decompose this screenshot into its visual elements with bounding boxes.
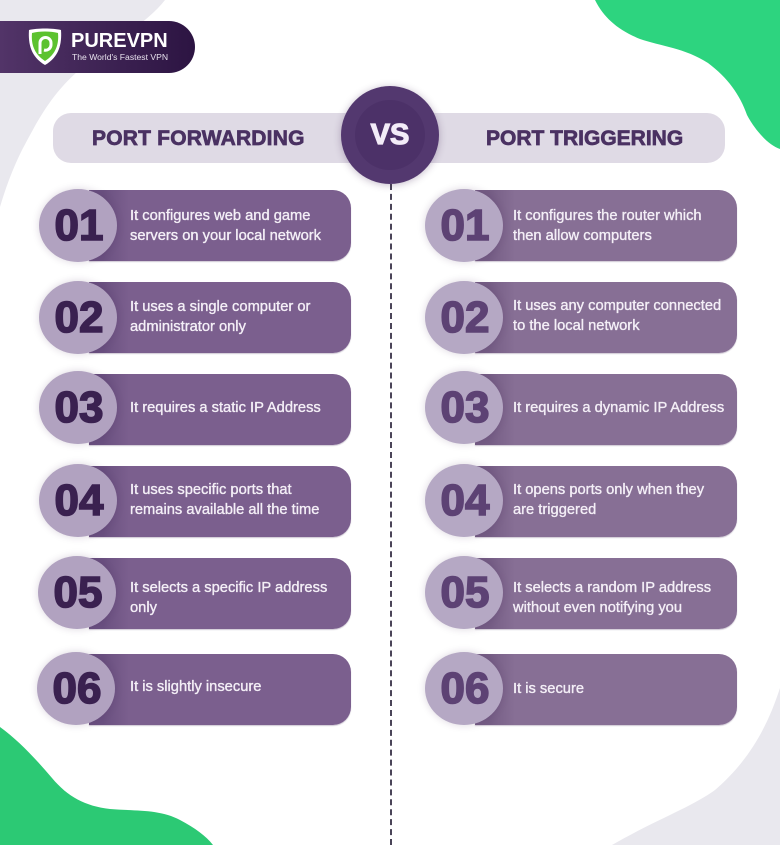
row 05 bar — [475, 558, 737, 629]
row 02 text — [513, 298, 721, 334]
row 04 text: are triggered — [513, 502, 596, 518]
row 01 number — [425, 189, 503, 262]
row 01 text: It configures the router which — [513, 208, 702, 224]
row 02 number: 02 — [441, 293, 489, 342]
row 04 number — [39, 464, 117, 537]
row 03 text: It requires a dynamic IP Address — [513, 400, 724, 416]
logo badge — [0, 21, 195, 73]
row 05 text: It selects a random IP address — [513, 580, 711, 596]
row 06 bar — [475, 654, 737, 725]
row 01 text: then allow computers — [513, 228, 652, 244]
row 03 text: It requires a static IP Address — [130, 400, 321, 416]
row 03 number: 03 — [441, 383, 489, 432]
row 02 bar — [89, 282, 351, 353]
row 05 number: 05 — [54, 568, 102, 617]
vs inner circle: VS — [371, 119, 409, 151]
row 05 text — [130, 580, 327, 616]
row 01 bar — [89, 190, 351, 261]
icon: shield — [28, 28, 62, 65]
row 06 text: It is secure — [513, 681, 584, 697]
row 04 text: It opens ports only when they — [513, 482, 704, 498]
row 05 text: without even notifying you — [513, 600, 682, 616]
header pill — [53, 113, 725, 163]
row 02 number — [425, 281, 503, 354]
row 04 text — [513, 482, 704, 518]
row 04 text: remains available all the time — [130, 502, 319, 518]
row 02 number: 02 — [55, 293, 103, 342]
row 06 number — [425, 652, 503, 725]
row 02 text: It uses a single computer or — [130, 299, 310, 315]
row 05 number: 05 — [441, 568, 489, 617]
brand name: PUREVPN — [71, 30, 168, 52]
row 04 number: 04 — [55, 476, 103, 525]
row 06 number: 06 — [441, 664, 489, 713]
row 03 number: 03 — [55, 383, 103, 432]
row 03 bar — [475, 374, 737, 445]
row 05 number — [425, 556, 503, 629]
row 01 number: 01 — [55, 201, 103, 250]
row 01 text: It configures web and game — [130, 208, 310, 224]
vs badge — [341, 86, 439, 184]
row 05 text — [512, 580, 711, 616]
row 02 text: to the local network — [513, 318, 640, 334]
row 02 text — [130, 299, 310, 335]
tagline: The World's Fastest VPN — [72, 52, 168, 62]
row 01 text: servers on your local network — [130, 228, 321, 244]
row 05 text: It selects a specific IP address — [130, 580, 327, 596]
row 05 text: only — [130, 600, 157, 616]
row 04 number: 04 — [441, 476, 489, 525]
vs inner circle — [355, 100, 425, 170]
row 03 number — [39, 371, 117, 444]
row 02 bar — [475, 282, 737, 353]
row 04 bar — [475, 466, 737, 537]
row 03 number — [425, 371, 503, 444]
row 01 bar — [475, 190, 737, 261]
row 04 bar — [89, 466, 351, 537]
row 06 text: It is slightly insecure — [130, 679, 261, 695]
row 05 bar — [89, 558, 351, 629]
heading: port forwarding: PORT FORWARDING — [92, 127, 305, 150]
row 03 bar — [89, 374, 351, 445]
row 06 number: 06 — [53, 664, 101, 713]
row 04 text: It uses specific ports that — [130, 482, 292, 498]
row 06 bar — [89, 654, 351, 725]
row 06 number — [37, 652, 115, 725]
row 02 text: It uses any computer connected — [513, 298, 721, 314]
row 01 text — [513, 208, 702, 244]
heading: port triggering: PORT TRIGGERING — [486, 127, 683, 150]
row 02 text: administrator only — [130, 319, 246, 335]
row 04 number — [425, 464, 503, 537]
row 05 number — [38, 556, 116, 629]
row 02 number — [39, 281, 117, 354]
row 01 number: 01 — [441, 201, 489, 250]
row 01 text — [130, 208, 322, 244]
row 01 number — [39, 189, 117, 262]
center dashed divider — [390, 184, 392, 845]
row 04 text — [130, 482, 319, 518]
